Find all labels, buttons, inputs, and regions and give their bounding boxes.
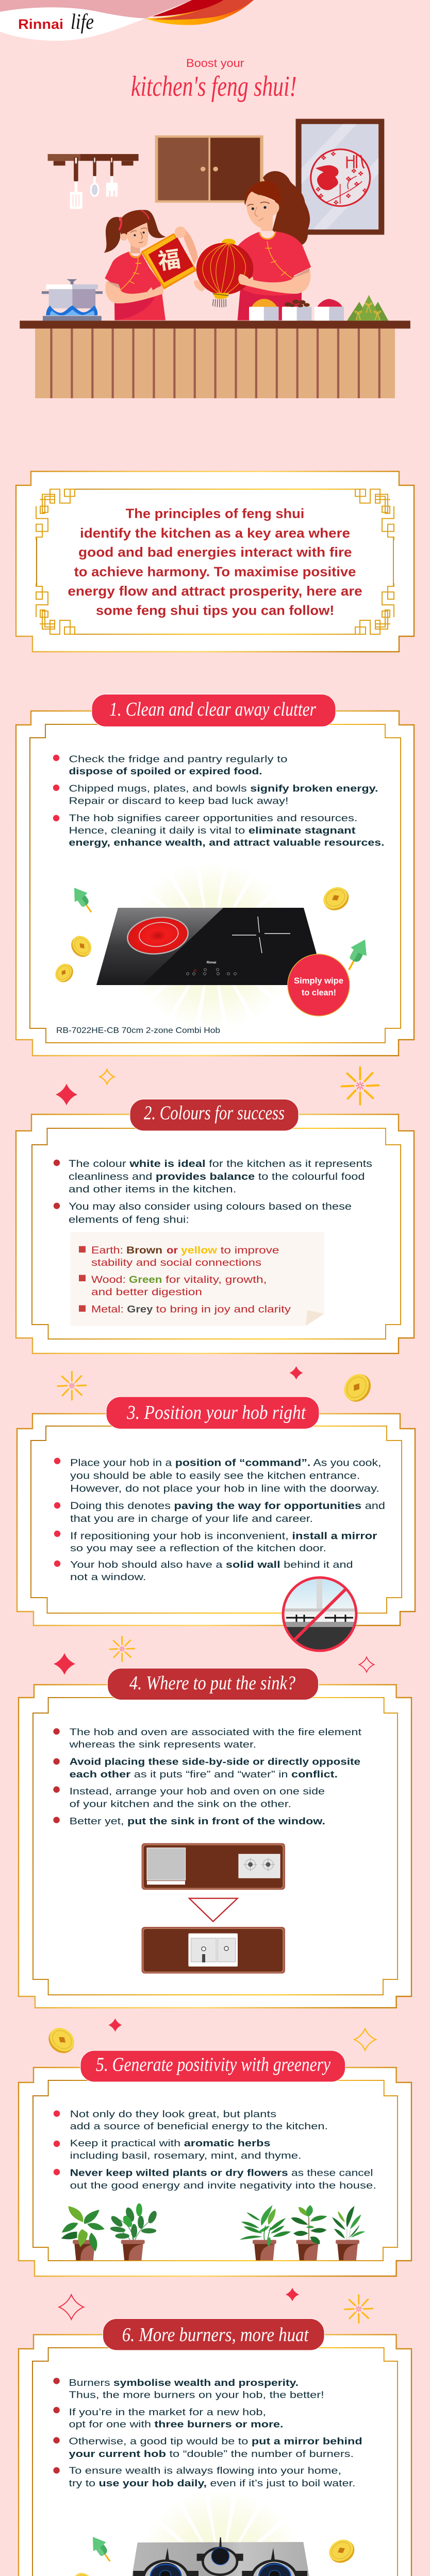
bullet list 2: You may also consider using colours based on these (69, 1201, 352, 1212)
wall cabinet (155, 135, 263, 202)
bullet list 3 (54, 1458, 385, 1582)
decoration: stars and firework above panel 2 (56, 1067, 378, 1106)
header swoosh (0, 0, 254, 41)
bullet list 6: Otherwise, a good tip would be to put a mirror behind (69, 2436, 362, 2446)
bullet list 2: The colour white is ideal for the kitchen as it represents (69, 1159, 372, 1170)
bullet list 6: If you’re in the market for a new hob, (69, 2407, 266, 2417)
bullet list 1: Check the fridge and pantry regularly to (69, 754, 288, 765)
bullet list 6: your current hob to “double” the number of burners. (69, 2449, 354, 2459)
heading pill 5 (80, 2050, 345, 2082)
bullet list 6: Thus, the more burners on your hob, the better! (69, 2390, 324, 2400)
bullet list 2 (54, 1159, 372, 1226)
bullet list 5: add a source of beneficial energy to the kitchen. (70, 2121, 328, 2131)
note card: feng shui elements: to improve (221, 1245, 279, 1256)
bullet list 5: including basil, rosemary, mint, and thyme. (70, 2150, 302, 2161)
plant 2 (109, 2204, 158, 2260)
pot on stove (42, 279, 103, 320)
caption 1: RB-7022HE-CB 70cm 2-zone Combi Hob (56, 1026, 220, 1035)
bullet list 1: energy, enhance wealth, and attract valuable resources. (69, 838, 385, 848)
bullet list 4: Better yet, put the sink in front of the window. (70, 1816, 325, 1826)
hob product image: RB-38HS (69, 2489, 358, 2576)
bullet list 6: opt for one with three burners or more. (69, 2419, 284, 2430)
bullet list 1: Chipped mugs, plates, and bowls signify broken energy. (69, 784, 378, 794)
bullet list 2: and other items in the kitchen. (69, 1184, 236, 1195)
intro text: identify the kitchen as a key area where (80, 525, 350, 540)
rice dumplings (347, 295, 388, 320)
intro text: good and bad energies interact with fire (78, 545, 352, 560)
bullet list 6: try to use your hob daily, even if it’s just to boil water. (69, 2478, 355, 2488)
callout: simply wipe to clean (288, 954, 350, 1016)
bullet list 1 (53, 754, 385, 848)
heading pill 2: 2. Colours for success (144, 1103, 285, 1124)
heading pill 6 (103, 2318, 324, 2350)
bullet list 5: Never keep wilted plants or dry flowers as these cancel (70, 2168, 373, 2178)
bullet list 5: Keep it practical with aromatic herbs (70, 2138, 270, 2148)
decoration: star, coin and outline star above panel 5 (44, 2019, 376, 2058)
note card: feng shui elements: Grey (127, 1304, 153, 1315)
heading pill 5: 5. Generate positivity with greenery (96, 2054, 330, 2075)
potted plants (61, 2204, 365, 2260)
logo (18, 10, 94, 34)
note card: feng shui elements: Brown (126, 1245, 162, 1256)
heading pill 2 (130, 1099, 299, 1131)
bullet list 4: of your kitchen and the sink on the other. (70, 1799, 291, 1809)
bullet list 5 (54, 2109, 376, 2191)
title: kitchen's feng shui! (131, 71, 297, 103)
intro text: to achieve harmony. To maximise positive (74, 564, 356, 579)
title (131, 57, 297, 103)
heading pill 4: 4. Where to put the sink? (129, 1672, 295, 1694)
note card: feng shui elements: Earth: (91, 1245, 123, 1256)
mother and daughter (104, 171, 311, 320)
hob product image: RB-7022HE-CB: 10 (193, 970, 197, 973)
note card: feng shui elements: stability and social connections (91, 1258, 261, 1268)
bullet list 3: However, do not place your hob in line with the doorway. (70, 1484, 379, 1494)
bullet list 3: If repositioning your hob is inconvenient, install a mirror (70, 1531, 377, 1541)
panel: 6 more burners, more huat (19, 2318, 411, 2576)
decoration: outline star, star and firework above panel 6 (59, 2288, 373, 2323)
bullet list 2: elements of feng shui: (69, 1215, 189, 1226)
panel: 3 position your hob right (17, 1397, 415, 1625)
bullet list 5: out the good energy and invite negativity into the house. (70, 2180, 376, 2191)
note card: feng shui elements: for vitality, growth, (166, 1275, 267, 1285)
bullet list 3: Place your hob in a position of “command”. As you cook, (70, 1458, 381, 1468)
intro text: The principles of feng shui (126, 506, 304, 521)
decoration: firework, star and coin above panel 3 (58, 1366, 376, 1406)
header section (0, 0, 410, 398)
daughter (104, 210, 198, 320)
bullet list 4: whereas the sink represents water. (69, 1739, 256, 1750)
logo: life (71, 10, 94, 34)
panel: intro (16, 471, 414, 652)
counter (20, 320, 410, 398)
utensil rack (48, 154, 139, 209)
bullet list 4: Avoid placing these side-by-side or directly opposite (70, 1757, 360, 1767)
note card: feng shui elements (71, 1232, 324, 1326)
note card: feng shui elements: or (167, 1245, 178, 1256)
bullet list 6: Burners symbolise wealth and prosperity. (69, 2378, 299, 2388)
kitchen wall and counter (20, 119, 410, 398)
hero illustration: kitchen scene (20, 119, 410, 398)
title: Boost your (186, 57, 244, 70)
bowls of food (249, 299, 344, 320)
bullet list 5: Not only do they look great, but plants (70, 2109, 276, 2120)
intro text (68, 506, 362, 618)
bullet list 6 (53, 2378, 362, 2488)
bullet list 4: Instead, arrange your hob and oven on one side (70, 1786, 325, 1797)
hob product image: RB-7022HE-CB (52, 861, 373, 1031)
intro text: energy flow and attract prosperity, here are (68, 583, 362, 599)
bullet list 3: not a window. (70, 1572, 146, 1582)
callout: simply wipe to clean: Simply wipe (294, 976, 343, 986)
decorative corners (36, 489, 394, 634)
note card: feng shui elements: Metal: (91, 1304, 124, 1315)
diagram: counter with sink (141, 1927, 285, 1974)
icon: no window behind hob (282, 1577, 358, 1652)
panel: 5 generate positivity with greenery (19, 2050, 411, 2276)
hob product image: RB-7022HE-CB: Rinnai (207, 961, 216, 964)
logo: Rinnai (18, 16, 63, 32)
burners (133, 2537, 307, 2576)
arrow: down triangle (189, 1899, 238, 1922)
bullet list 4: each other as it puts “fire” and “water” in conflict. (70, 1769, 338, 1780)
bullet list 6: To ensure wealth is always flowing into your home, (69, 2466, 341, 2476)
panel: 1 clean and clear away clutter (16, 694, 414, 1056)
callout: simply wipe to clean: to clean! (302, 988, 336, 997)
plant 5 (332, 2206, 365, 2260)
heading pill 1: 1. Clean and clear away clutter (109, 699, 316, 720)
bullet list 3: so you may see a reflection of the kitchen door. (70, 1543, 326, 1553)
bullet list 4 (53, 1727, 361, 1826)
icon: rockets and coins (52, 883, 373, 986)
fu character sign: 福 (156, 241, 182, 276)
plant 4 (291, 2205, 327, 2260)
bullet list 1: The hob signifies career opportunities and resources. (69, 813, 358, 823)
panel: 4 where to put the sink (19, 1668, 411, 2008)
heading pill 3 (106, 1397, 319, 1429)
intro text: some feng shui tips you can follow! (96, 602, 334, 618)
plant 3 (240, 2205, 291, 2260)
mother (238, 171, 311, 320)
note card: feng shui elements: Green (129, 1275, 162, 1285)
wall picture: paper cut (295, 119, 384, 235)
icon: rockets and coins (69, 2532, 358, 2576)
plant 1 (61, 2206, 105, 2260)
decoration: firework and stars above panel 4 (54, 1636, 374, 1675)
note card: feng shui elements: yellow (181, 1245, 217, 1256)
heading pill 6: 6. More burners, more huat (122, 2324, 309, 2346)
bullet list 2: cleanliness and provides balance to the colourful food (69, 1172, 365, 1182)
bullet list 1: Hence, cleaning it daily is vital to eliminate stagnant (69, 825, 356, 836)
mother's arm (238, 268, 310, 294)
bullet list 1: Repair or discard to keep bad luck away! (69, 796, 289, 806)
diagram: counter with oven and hob (141, 1843, 285, 1890)
heading pill 4 (107, 1668, 319, 1700)
bullet list 1: dispose of spoiled or expired food. (69, 766, 262, 776)
bullet list 3: that you are in charge of your life and career. (70, 1514, 313, 1524)
heading pill 3: 3. Position your hob right (126, 1402, 306, 1423)
note card: feng shui elements: to bring in joy and clarity (156, 1304, 291, 1315)
heading pill 1 (92, 694, 336, 726)
panel: 2 colours for success (16, 1099, 414, 1353)
lantern (194, 239, 253, 308)
note card: feng shui elements: and better digestion (91, 1287, 202, 1298)
bullet list 3: Doing this denotes paving the way for opportunities and (70, 1501, 385, 1512)
note card: feng shui elements: Wood: (91, 1275, 126, 1285)
bullet list 4: The hob and oven are associated with the fire element (70, 1727, 361, 1737)
bullet list 3: Your hob should also have a solid wall behind it and (70, 1560, 353, 1570)
bullet list 3: you should be able to easily see the kitchen entrance. (70, 1470, 360, 1482)
